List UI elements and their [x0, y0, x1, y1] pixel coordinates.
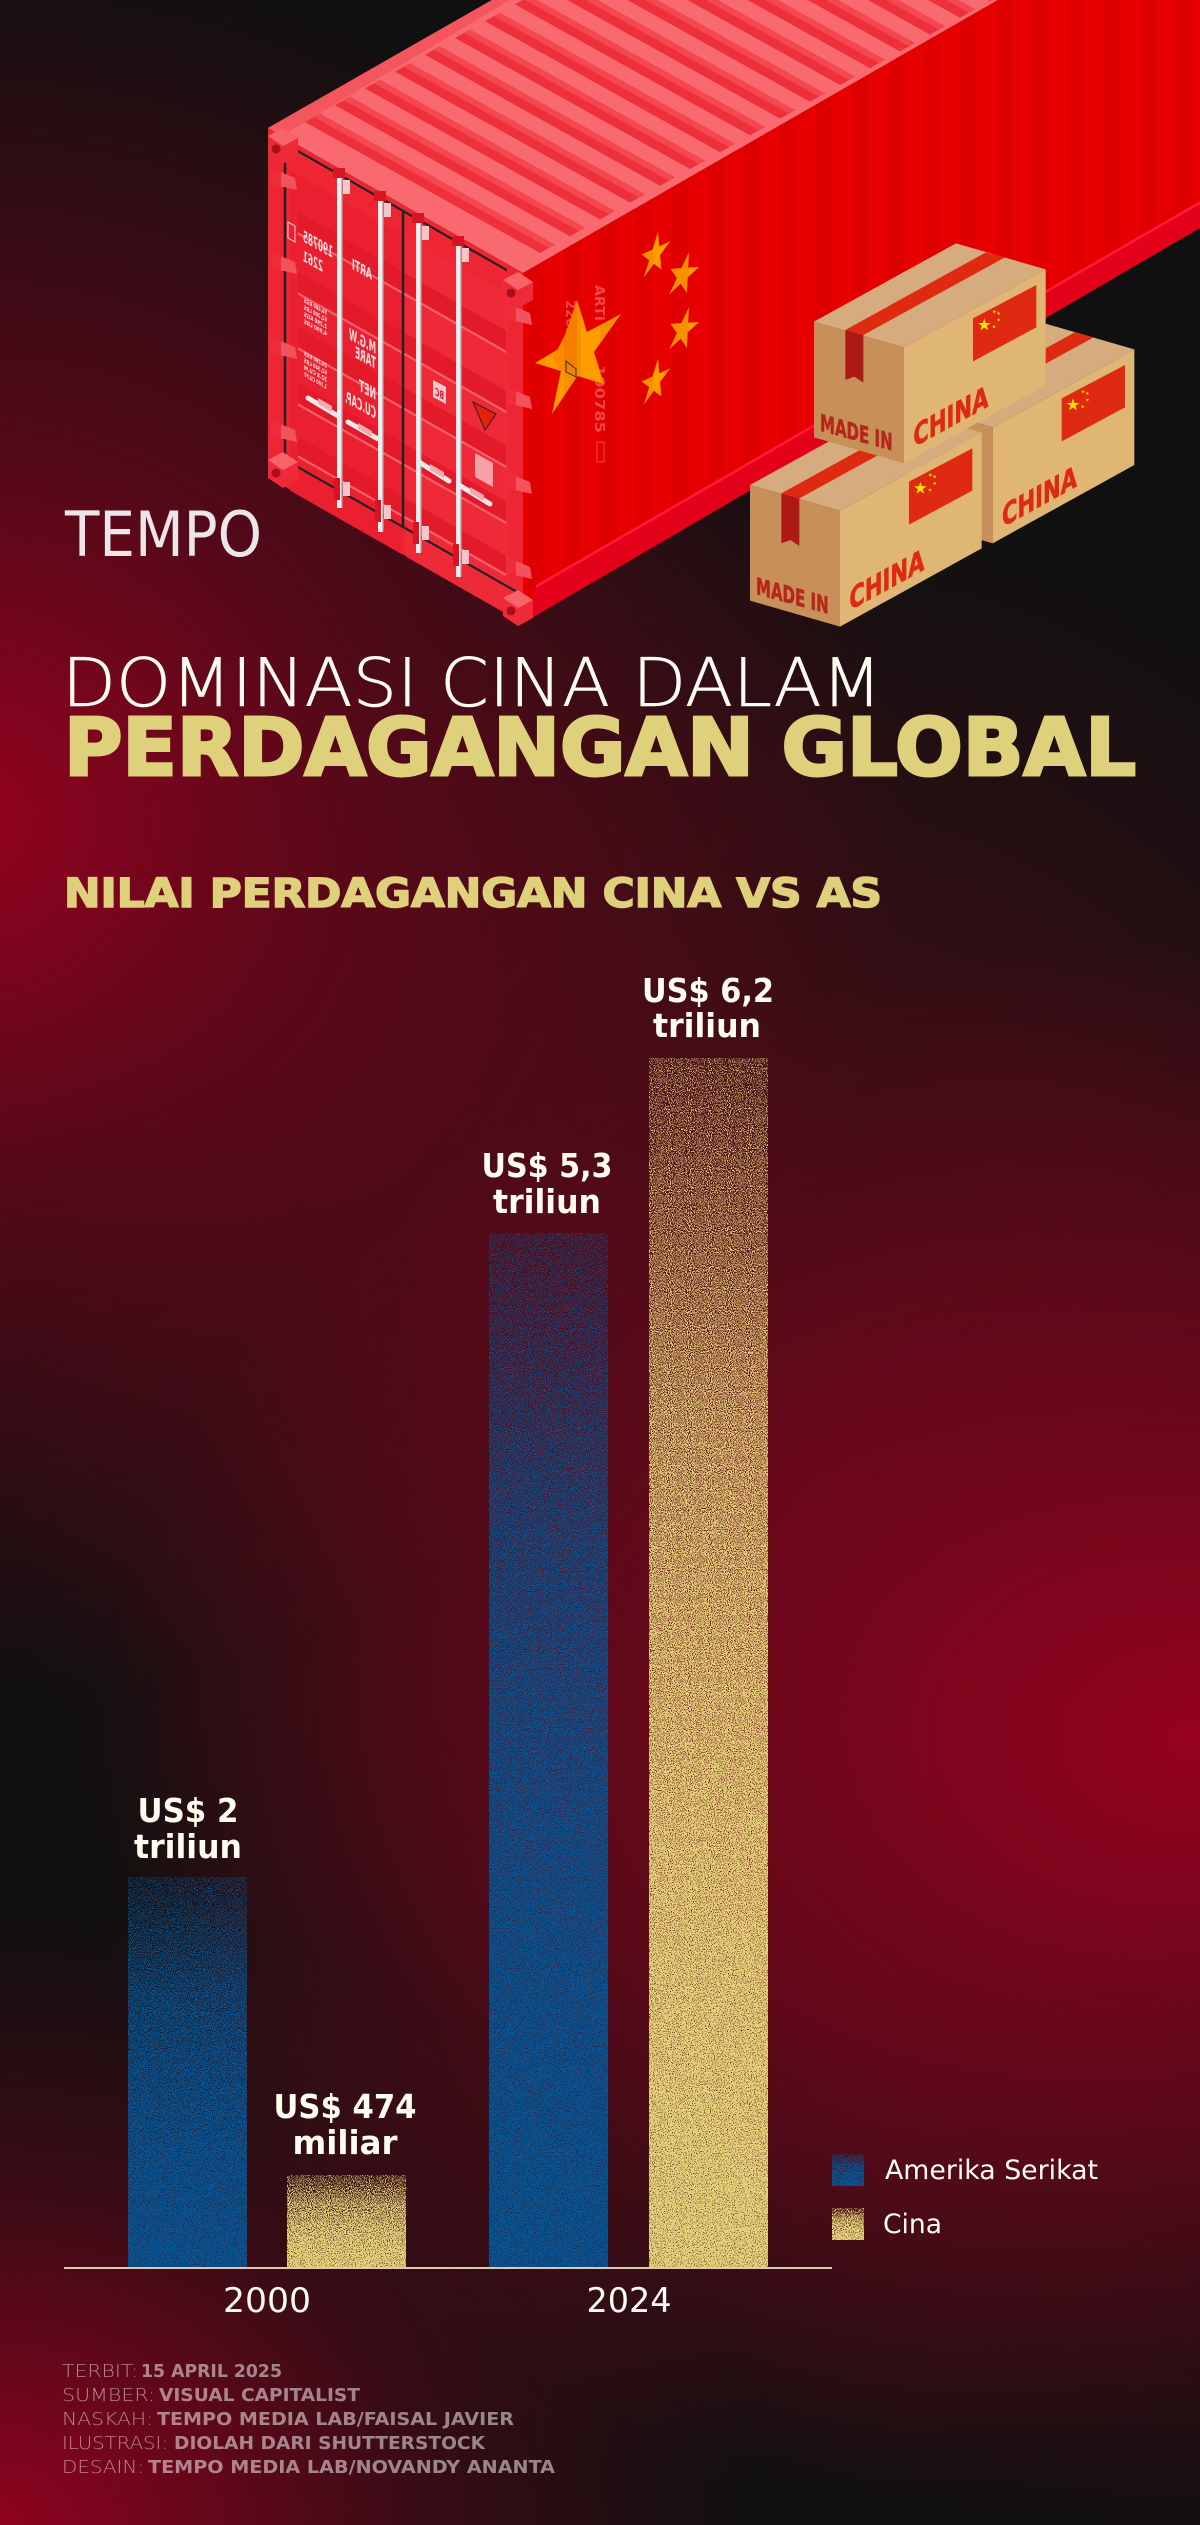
- value label: US$ 2 triliun: US$ 2: [138, 1791, 238, 1830]
- bar: Amerika Serikat 2000: [128, 1877, 247, 2268]
- value label: US$ 5,3 triliun: [482, 1146, 612, 1221]
- legend item: Amerika Serikat: Amerika Serikat: [885, 2155, 1098, 2186]
- logo: TEMPO: TEMPO: [64, 498, 262, 571]
- box: bottom left: CHINA: [849, 541, 924, 618]
- mirrored door markings: 62,200 LBS: [304, 304, 327, 324]
- hinges: [271, 168, 297, 190]
- chart heading: NILAI PERDAGANGAN CINA VS AS: [64, 871, 882, 917]
- mirrored door markings: TARE: [355, 343, 376, 374]
- mirrored door markings: [288, 222, 446, 424]
- axis label 2000: 2000: [223, 2281, 311, 2321]
- value label: US$ 6,2 triliun: triliun: [653, 1006, 761, 1045]
- legend item: Cina: Cina: [883, 2209, 942, 2240]
- mirrored door markings: 190785: [303, 228, 333, 263]
- illustration: shipping container: [268, 0, 1200, 626]
- mirrored door markings: 4,990 LBS: [304, 318, 327, 338]
- box: top: CHINA: [913, 378, 988, 455]
- warning triangle: [473, 402, 496, 430]
- credits: 15 APRIL 2025: [141, 2361, 282, 2382]
- mirrored door markings: ARTI: [352, 255, 372, 284]
- legend: [832, 2154, 1098, 2240]
- box: bottom left: MADE IN: [756, 572, 829, 620]
- container side with flag: [523, 0, 1200, 623]
- axis label 2024: 2024: [586, 2281, 672, 2321]
- value label: US$ 6,2 triliun: US$ 6,2: [642, 971, 774, 1010]
- credits: DESAIN:: [62, 2457, 144, 2478]
- box: back right: [903, 323, 1134, 543]
- mirrored door markings: M.G.W: [349, 325, 376, 359]
- value label: US$ 474 miliar: US$ 474: [274, 2087, 416, 2126]
- bar: Cina 2000: [287, 2175, 406, 2268]
- axis baseline: [64, 2267, 832, 2269]
- side stencil text: 2261: [562, 300, 577, 336]
- door lock bars: [308, 168, 490, 577]
- value label: US$ 6,2 triliun: [642, 971, 774, 1045]
- legend item: Cina: [832, 2208, 942, 2240]
- mirrored door markings: 32.8 CU.M: [304, 364, 327, 384]
- value label: US$ 2 triliun: triliun: [134, 1827, 242, 1866]
- title line 1: DOMINASI CINA DALAM: [62, 644, 882, 722]
- mirrored door markings: 2261: [303, 247, 323, 276]
- box: top: [814, 243, 1046, 463]
- bar: Cina 2024: [649, 1058, 768, 2268]
- side stencil text: 190785: [591, 365, 606, 433]
- bar: Amerika Serikat 2024: [489, 1233, 608, 2268]
- bar chart: [64, 971, 832, 2321]
- credits: TEMPO MEDIA LAB/FAISAL JAVIER: [157, 2409, 514, 2430]
- credits: NASKAH:: [62, 2409, 153, 2430]
- title line 2: PERDAGANGAN GLOBAL: [64, 702, 1136, 794]
- credits: DIOLAH DARI SHUTTERSTOCK: [174, 2433, 486, 2454]
- side stencil text: [562, 285, 606, 462]
- mirrored door markings: 2,290 KGS: [304, 311, 327, 331]
- door panel ribs: [298, 212, 506, 574]
- mirrored door markings: 28,280 KGS: [304, 350, 327, 370]
- credits: TERBIT:: [62, 2361, 138, 2382]
- credits: [62, 2361, 555, 2478]
- value label: US$ 5,3 triliun: US$ 5,3: [482, 1146, 612, 1185]
- container doors: [268, 128, 533, 626]
- credits: ILUSTRASI:: [62, 2433, 168, 2454]
- box: bottom left: [750, 407, 982, 627]
- mirrored door markings: CU.CAP.: [345, 388, 376, 424]
- value label: US$ 474 miliar: miliar: [292, 2123, 398, 2162]
- pink door label: [475, 453, 493, 487]
- box: back right: CHINA: [1002, 458, 1077, 535]
- bottom rail: [523, 204, 1200, 623]
- mirrored door markings: BC: [435, 385, 444, 403]
- box: top: MADE IN: [820, 409, 893, 457]
- value label: US$ 2 triliun: [134, 1791, 242, 1866]
- credits: TEMPO MEDIA LAB/NOVANDY ANANTA: [148, 2457, 555, 2478]
- credits: SUMBER:: [62, 2385, 155, 2406]
- credits: VISUAL CAPITALIST: [159, 2385, 361, 2406]
- container roof: [268, 0, 1035, 273]
- value label: US$ 5,3 triliun: triliun: [493, 1182, 601, 1221]
- illustration: stacked boxes: [750, 243, 1134, 627]
- mirrored door markings: 1,160 CU.FT: [304, 371, 327, 391]
- flag star large: [535, 300, 621, 414]
- mirrored door markings: 62,340 LBS: [304, 357, 327, 377]
- corner castings: [268, 128, 533, 626]
- mirrored door markings: 56,480 KGS: [304, 297, 327, 317]
- value label: US$ 474 miliar: [274, 2087, 416, 2162]
- flag stars small: [638, 225, 703, 407]
- mirrored door markings: NET: [359, 377, 376, 405]
- side stencil text: ARTI: [591, 285, 606, 321]
- door gasket lines: [285, 144, 517, 592]
